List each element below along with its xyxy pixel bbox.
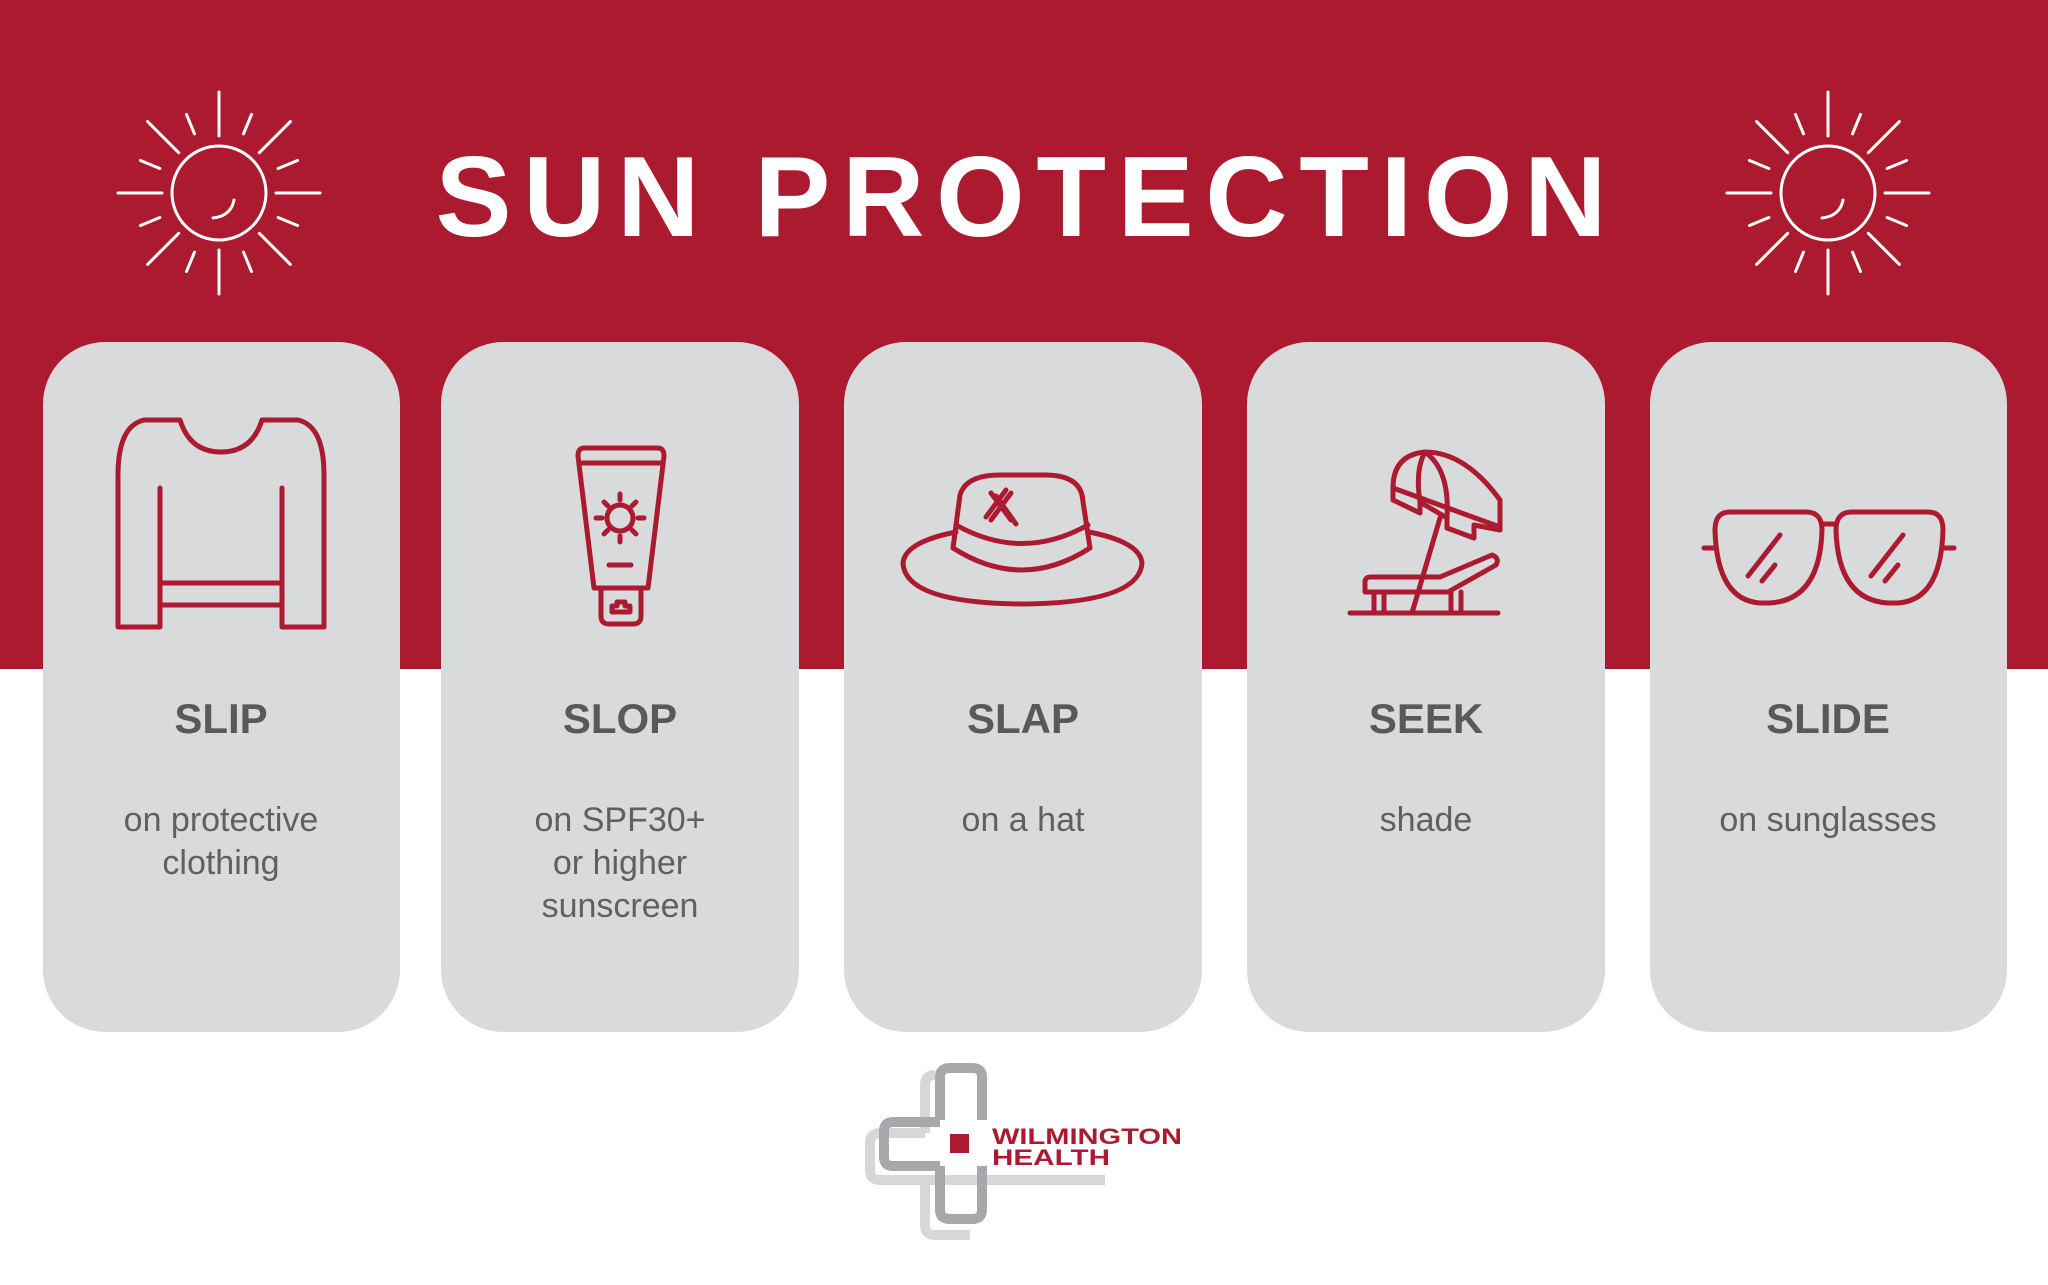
label: seek: SEEK (1369, 695, 1483, 742)
red square (950, 1134, 969, 1153)
light gray shadow cross (870, 1075, 1105, 1235)
red header band (0, 0, 2048, 669)
text: slop description: sunscreen (542, 887, 698, 925)
logo: wilmington health: HEALTH (992, 1145, 1110, 1170)
text: slide description: on sunglasses (1719, 801, 1937, 839)
title: SUN PROTECTION (436, 134, 1606, 261)
icon: hat (903, 475, 1142, 604)
label: slap: SLAP (967, 695, 1079, 742)
label: slide: SLIDE (1766, 695, 1890, 742)
icon: sunglasses (1704, 512, 1954, 603)
text: slip description: on protective (124, 801, 318, 839)
logo: wilmington health (870, 1068, 1182, 1235)
text: slop description: on SPF30+ (534, 801, 706, 839)
logo text: WILMINGTON (992, 1124, 1182, 1149)
text: seek description: shade (1380, 801, 1472, 839)
icon: sun right (1727, 92, 1929, 294)
panel: slap (844, 342, 1202, 1032)
label: slop: SLOP (563, 695, 677, 742)
icon: sun left (118, 92, 320, 294)
label: slip: SLIP (174, 695, 268, 742)
icon: beach umbrella and chair (1350, 452, 1500, 613)
text: slap description: on a hat (962, 801, 1085, 839)
panel: slide (1650, 342, 2007, 1032)
text: slop description: or higher (553, 844, 687, 882)
panel: seek (1247, 342, 1605, 1032)
icon: sunscreen tube (578, 448, 664, 624)
icon: sweater (118, 420, 324, 627)
panel: slop (441, 342, 799, 1032)
text: slip description: clothing (162, 844, 280, 882)
panel: slip (43, 342, 400, 1032)
dark gray cross (884, 1068, 982, 1219)
